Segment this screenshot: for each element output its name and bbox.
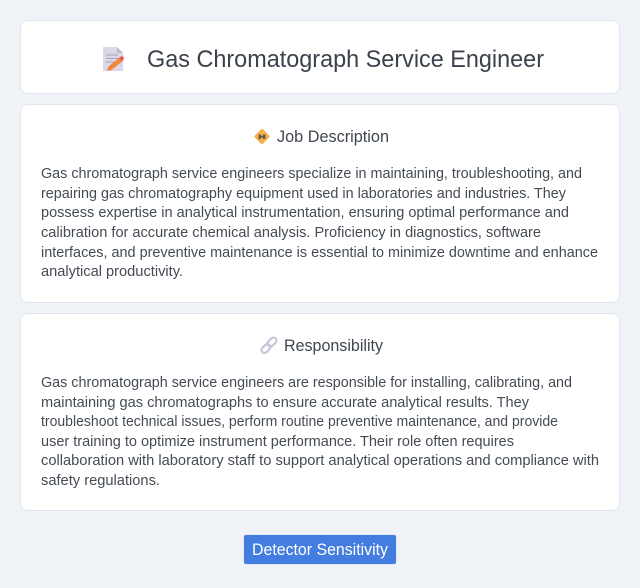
responsibility text: troubleshoot technical issues, perform routine preventive maintenance, and provide — [41, 414, 558, 430]
icon: link — [260, 336, 278, 354]
panel: title header — [20, 20, 620, 94]
responsibility text: safety regulations. — [41, 473, 160, 489]
heading: job description: Job Description — [277, 128, 389, 146]
job description text — [41, 166, 598, 280]
title: Gas Chromatograph Service Engineer — [147, 46, 544, 73]
button: detector sensitivity — [243, 534, 397, 565]
job description text: interfaces, and preventive maintenance is essential to minimize downtime and enhance — [41, 245, 598, 261]
responsibility text: collaboration with laboratory staff to support analytical operations and compliance with — [41, 453, 599, 469]
responsibility text: maintaining gas chromatographs to ensure accurate analytical results. They — [41, 395, 530, 411]
panel: responsibility — [20, 313, 620, 511]
responsibility text: Gas chromatograph service engineers are responsible for installing, calibrating, and — [41, 375, 572, 391]
job description text: analytical productivity. — [41, 264, 183, 280]
icon: document with pencil — [103, 47, 124, 71]
heading: responsibility: Responsibility — [284, 337, 384, 355]
job description text: repairing gas chromatography equipment used in laboratories and industries. They — [41, 186, 567, 202]
job description text: calibration for accurate chemical analysis. Proficiency in diagnostics, software — [41, 225, 541, 241]
icon: warning diamond — [254, 128, 270, 145]
button: detector sensitivity: Detector Sensitivity — [252, 541, 389, 559]
responsibility text — [41, 375, 599, 489]
responsibility text: user training to optimize instrument performance. Their role often requires — [41, 434, 514, 450]
panel: job description — [20, 104, 620, 303]
job description text: Gas chromatograph service engineers specialize in maintaining, troubleshooting, and — [41, 166, 582, 182]
job description text: possess expertise in analytical instrumentation, ensuring optimal performance and — [41, 205, 569, 221]
